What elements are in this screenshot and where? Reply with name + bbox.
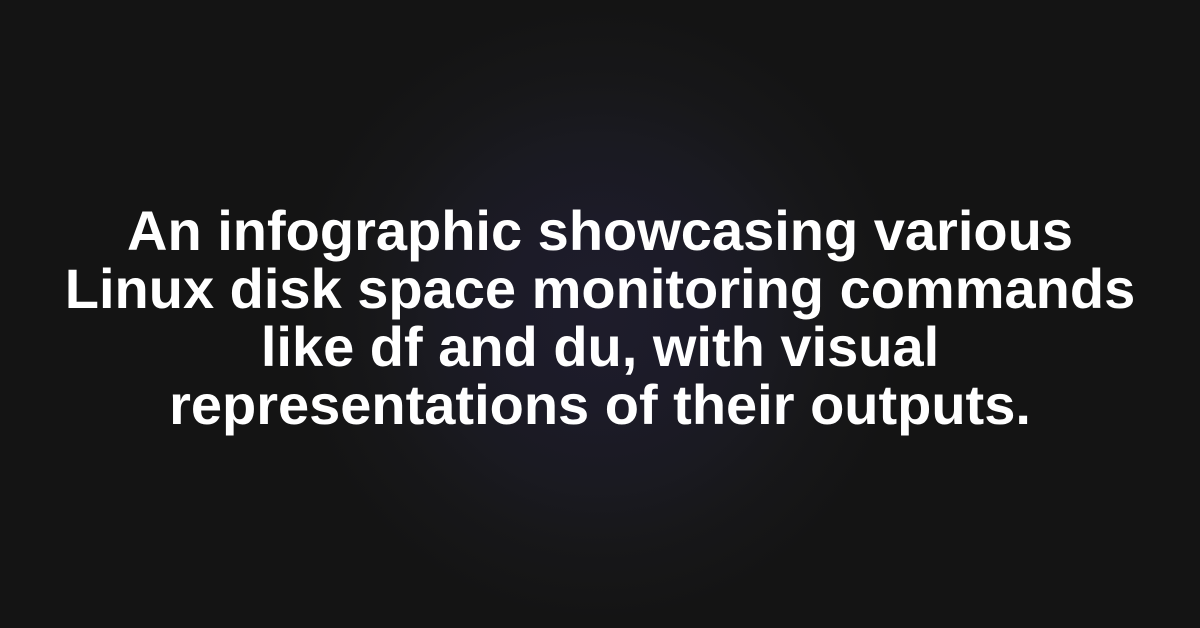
title: Linux disk space monitoring commands bbox=[65, 257, 1135, 320]
title bbox=[65, 199, 1135, 436]
title: representations of their outputs. bbox=[169, 373, 1031, 436]
title: An infographic showcasing various bbox=[127, 199, 1073, 262]
title: like df and du, with visual bbox=[261, 315, 939, 378]
